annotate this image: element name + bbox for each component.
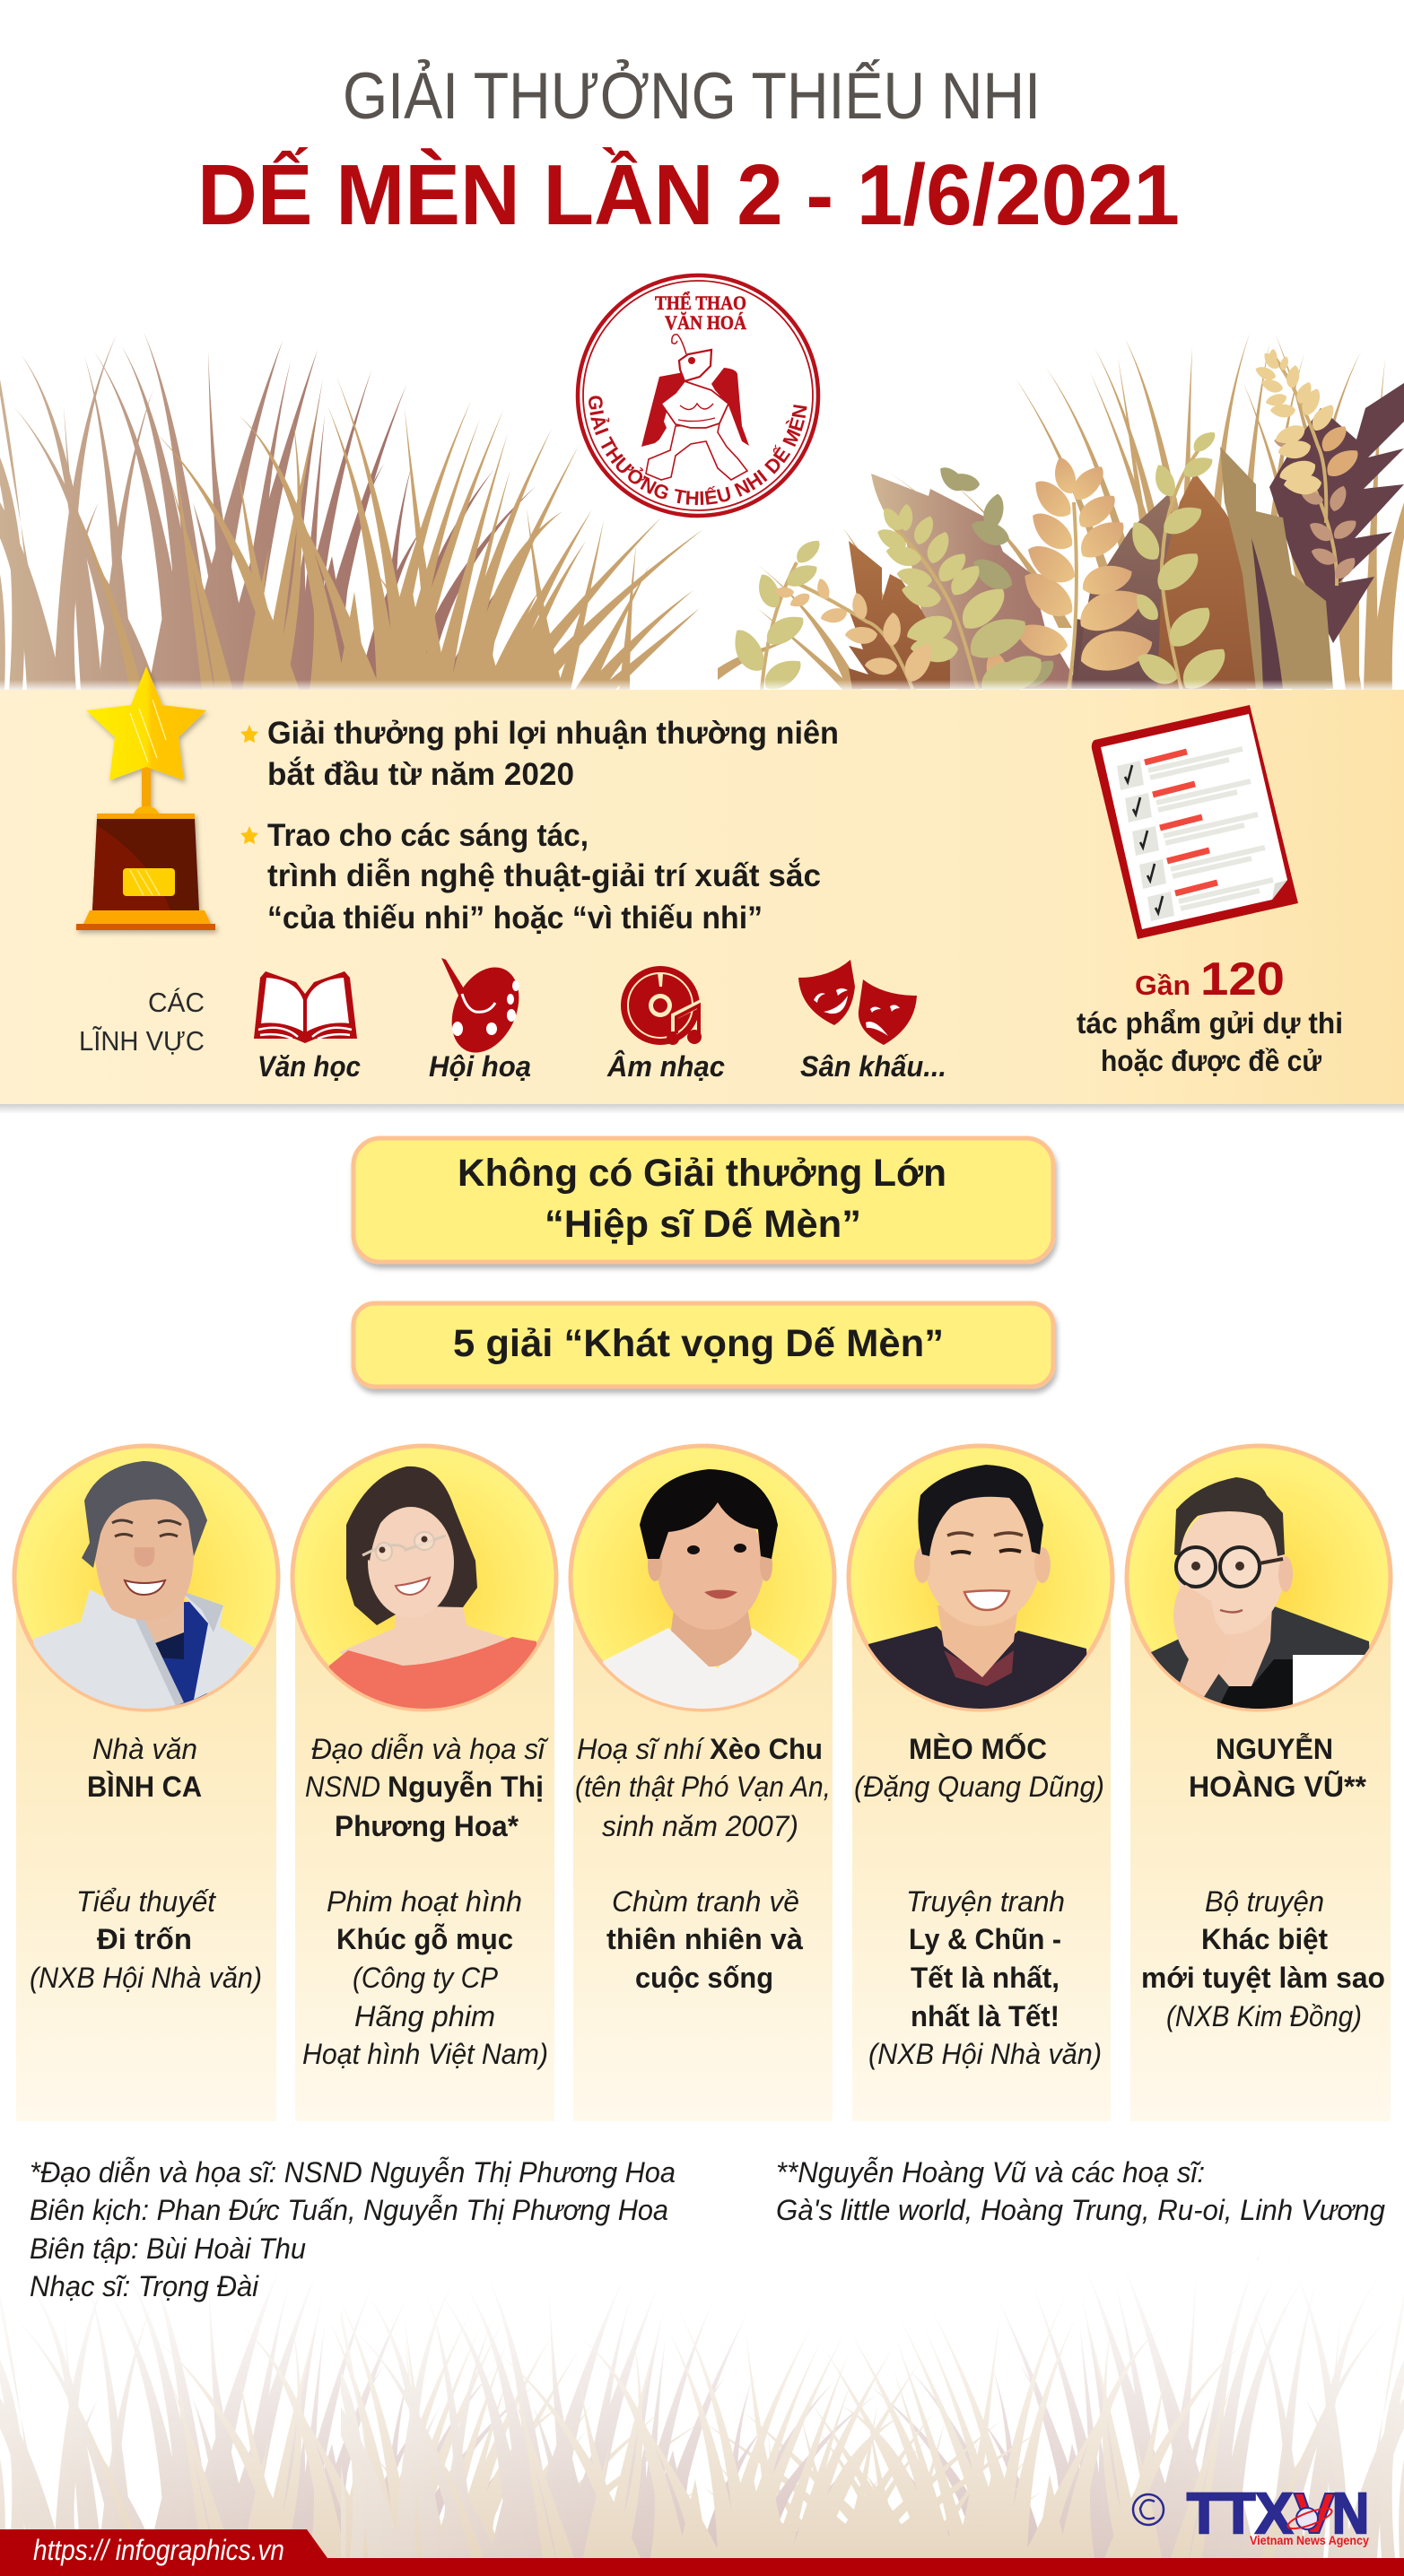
footnote: illustrators (776, 2156, 1385, 2226)
label: Văn học: Văn học (257, 1050, 361, 1083)
winner 3 text: Chùm tranh về (612, 1885, 799, 1918)
logo: Dế Mèn award seal (576, 273, 820, 518)
olive mid leaves (935, 463, 1059, 692)
footer bar with website: https:// infographics.vn (33, 2534, 284, 2566)
fields label: CÁC (148, 987, 205, 1018)
footnote: film credits: *Đạo diễn và họa sĩ: NSND Nguyễn Thị Phương Hoa (30, 2156, 676, 2189)
bullet text: award description (240, 716, 839, 936)
bullet text: award description: Trao cho các sáng tác, (267, 818, 589, 853)
small olive stalk left (726, 535, 824, 696)
panel: winner 3 Xèo Chu (571, 1446, 834, 2121)
winner 4 text: Ly & Chũn - (909, 1923, 1061, 1955)
logo: Dế Mèn award seal: THỂ THAO (655, 292, 746, 314)
winner 4 text: Tết là nhất, (911, 1962, 1060, 1994)
winner 3 text: cuộc sống (635, 1962, 773, 1994)
winner 5 text: (NXB Kim Đồng) (1166, 2000, 1362, 2032)
icon: clipboard checklist (1092, 705, 1298, 939)
plants: right group of grass and leaves (718, 334, 1404, 703)
winner 4 text: Truyện tranh (906, 1885, 1065, 1918)
footnote: illustrators: **Nguyễn Hoàng Vũ và các hoạ sĩ: (776, 2156, 1205, 2189)
winner 4 text: (Đặng Quang Dũng) (854, 1771, 1104, 1803)
palm leaf: tan mauve (871, 474, 1081, 689)
winner 1 text: (NXB Hội Nhà văn) (30, 1962, 262, 1994)
golden stalk right (1253, 349, 1363, 496)
palm leaf: mauve centre (1077, 493, 1177, 689)
winner 2 text: Hãng phim (354, 2000, 495, 2032)
grass: left field (0, 332, 703, 691)
winner 3 text (575, 1733, 831, 1994)
callout: five aspiration prizes: 5 giải “Khát vọng Dế Mèn” (453, 1322, 944, 1365)
palm leaf: plum stem (1251, 538, 1283, 689)
panel: award information band (0, 690, 1404, 1114)
palm leaf: brown left (849, 541, 950, 689)
callout: no grand prize: “Hiệp sĩ Dế Mèn” (545, 1203, 861, 1246)
footnote: illustrators: Gà's little world, Hoàng Trung, Ru-oi, Linh Vương (776, 2194, 1385, 2226)
palm leaf: dark lower (1072, 619, 1157, 689)
callout: no grand prize (353, 1138, 1053, 1262)
winner 3 text: Xèo Chu (710, 1733, 823, 1765)
fields label: LĨNH VỰC (79, 1025, 205, 1057)
logo: TTXVN: V (1294, 2481, 1335, 2546)
panel: winner 4 Mèo Mốc (849, 1446, 1112, 2121)
winner 5 text: Bộ truyện (1205, 1885, 1324, 1918)
cricket wings (641, 368, 749, 447)
stat: nearly 120 works (1077, 953, 1343, 1077)
winner 2 text: NSND (305, 1771, 380, 1803)
bullet text: award description: “của thiếu nhi” hoặc “vì thiếu nhi” (267, 901, 763, 936)
logo: TTXVN: N (1332, 2481, 1369, 2546)
logo: TTXVN: Vietnam News Agency (1250, 2533, 1369, 2547)
winner 2 text: Nguyễn Thị (388, 1771, 544, 1803)
bullet text: award description: Giải thưởng phi lợi nhuận thường niên (267, 716, 839, 751)
title line 1: GIẢI THƯỞNG THIẾU NHI (343, 60, 1041, 133)
cricket body (661, 381, 728, 428)
logo: TTXVN: TTX (1187, 2481, 1293, 2546)
icon: theatre masks (798, 960, 917, 1045)
right grass blades (718, 334, 1404, 691)
winner 1 text: Đi trốn (97, 1923, 192, 1955)
label: Sân khấu: Sân khấu... (800, 1050, 946, 1083)
portrait: Mèo Mốc (861, 1465, 1090, 1722)
winner 4 text: MÈO MỐC (909, 1733, 1047, 1765)
soft fade above band (0, 680, 1404, 690)
footer grass background (0, 2253, 1404, 2558)
cricket head (679, 350, 711, 381)
footnote: film credits: Biên tập: Bùi Hoài Thu (30, 2232, 306, 2265)
label: Âm nhạc: Âm nhạc (606, 1050, 725, 1083)
bullet text: award description: trình diễn nghệ thuật-giải trí xuất sắc (267, 857, 821, 893)
winner 2 text: Hoạt hình Việt Nam) (302, 2038, 548, 2070)
footnote: film credits: Biên kịch: Phan Đức Tuấn, Nguyễn Thị Phương Hoa (30, 2194, 668, 2226)
icon: bullet star 2 (240, 826, 258, 844)
stat: nearly 120 works: hoặc được đề cử (1101, 1044, 1321, 1077)
winner 2 text: Khúc gỗ mục (336, 1923, 513, 1955)
bullet text: award description: bắt đầu từ năm 2020 (267, 756, 574, 792)
peach rice stalk (980, 455, 1156, 692)
winner 1 text: Tiểu thuyết (76, 1885, 216, 1918)
winner 2 text: Phim hoạt hình (327, 1885, 522, 1918)
logo: TTXVN (1133, 2481, 1369, 2547)
winner 4 text: nhất là Tết! (911, 2000, 1060, 2032)
callout: no grand prize: Không có Giải thưởng Lớn (458, 1152, 946, 1195)
winner 5 text (1141, 1733, 1385, 2032)
palm leaf: plum (1269, 383, 1404, 643)
title (197, 60, 1180, 243)
logo: Dế Mèn award seal: VĂN HOÁ (665, 311, 746, 334)
footnote: film credits (30, 2156, 676, 2302)
panel: winner 2 Nguyễn Thị Phương Hoa (292, 1446, 556, 2121)
stat: nearly 120 works: 120 (1200, 953, 1285, 1005)
winner 2 text: (Công ty CP (353, 1962, 499, 1994)
icon: bullet star 1 (240, 725, 258, 743)
small peach stalk (774, 577, 937, 686)
portrait: Nguyễn Hoàng Vũ (1149, 1477, 1373, 1722)
footnote: film credits: Nhạc sĩ: Trọng Đài (30, 2270, 259, 2302)
title line 2: DẾ MÈN LẦN 2 - 1/6/2021 (197, 146, 1180, 243)
olive stalk centre (1123, 427, 1233, 697)
winner 5 text: NGUYỄN (1216, 1733, 1333, 1765)
icon: music disc (621, 966, 702, 1045)
icon: trophy (76, 666, 215, 930)
stat: nearly 120 works: Gần (1135, 970, 1190, 1001)
portrait: Phương Hoa (323, 1466, 538, 1722)
winner 3 text: thiên nhiên và (606, 1923, 803, 1955)
winner 5 text: Khác biệt (1201, 1923, 1328, 1955)
label: Hội hoạ: Hội hoạ (429, 1050, 531, 1083)
winner 1 text: Nhà văn (92, 1733, 197, 1765)
winner 5 text: HOÀNG VŨ** (1189, 1771, 1367, 1803)
portrait: Bình Ca (33, 1461, 255, 1718)
winner 1 text (30, 1733, 262, 1994)
winner 5 text: mới tuyệt làm sao (1141, 1962, 1385, 1994)
mauve small stalk (1273, 437, 1360, 583)
palm leaf: olive (1220, 447, 1333, 689)
seal curved text: GIẢI THƯỞNG THIẾU NHI DẾ MÈN (589, 396, 807, 506)
winner 3 text: (tên thật Phó Vạn An, (575, 1771, 831, 1803)
footer bar with website (0, 2529, 1404, 2576)
winner 3 text: sinh năm 2007) (602, 1810, 798, 1842)
stat: nearly 120 works: tác phẩm gửi dự thi (1077, 1006, 1343, 1040)
fields label (79, 987, 205, 1057)
portrait: Xèo Chu (601, 1469, 798, 1722)
icon: book (254, 971, 357, 1043)
panel: winner 1 Bình Ca (14, 1446, 278, 2121)
winner 2 text: Phương Hoa* (335, 1810, 519, 1842)
winner 1 text: BÌNH CA (87, 1771, 202, 1803)
winner 4 text: (NXB Hội Nhà văn) (868, 2038, 1102, 2070)
palm leaf: brown centre (1157, 473, 1267, 689)
winner 2 text (302, 1733, 549, 2070)
stems (762, 356, 1337, 691)
cricket legs (646, 423, 747, 480)
panel: winner 5 Nguyễn Hoàng Vũ (1127, 1446, 1391, 2121)
olive stalk left of peach (874, 504, 1049, 703)
callout: five aspiration prizes (353, 1303, 1053, 1387)
icon: palette and brush (439, 956, 532, 1064)
winner 4 text (854, 1733, 1104, 2070)
winner 3 text: Hoạ sĩ nhí (577, 1733, 705, 1765)
winner 2 text: Đạo diễn và họa sĩ (311, 1733, 549, 1765)
